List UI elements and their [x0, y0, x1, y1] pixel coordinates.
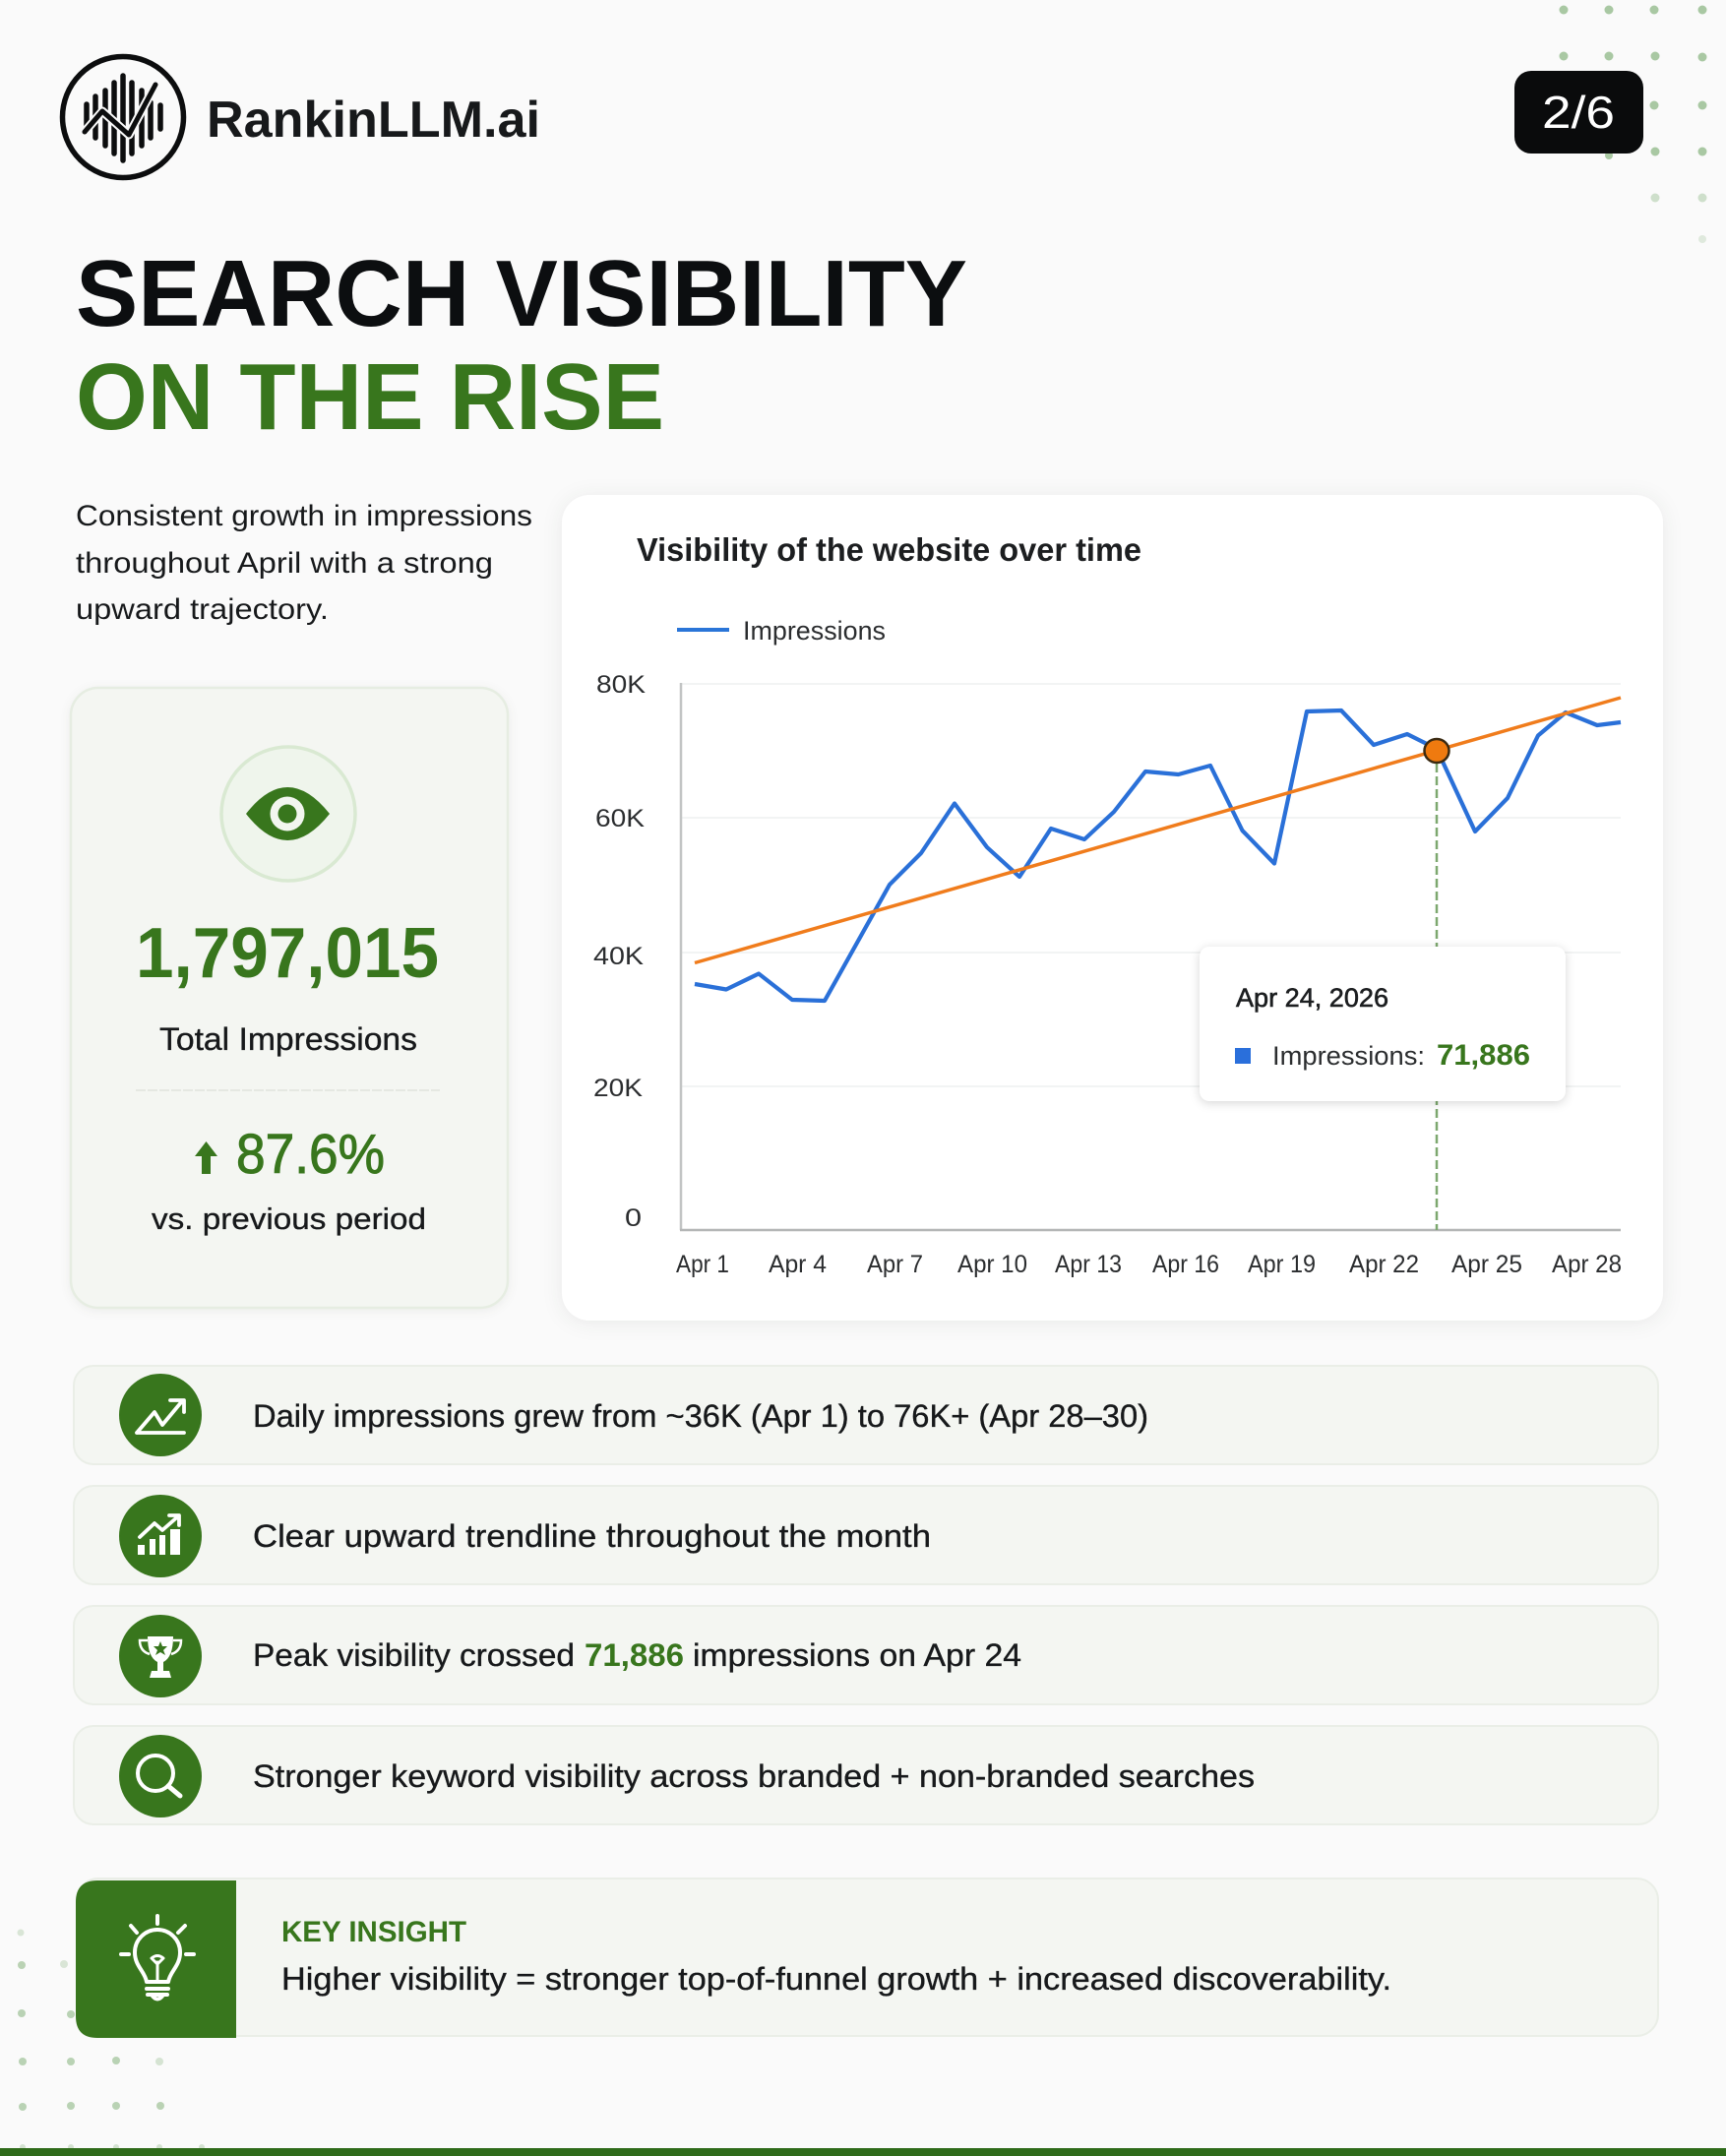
x axis labels: Apr 25 — [1451, 1251, 1522, 1278]
panel: line chart — [562, 495, 1663, 1321]
title: SEARCH VISIBILITY — [76, 241, 967, 346]
title — [76, 241, 967, 450]
icon: eye — [221, 747, 355, 881]
y axis labels — [593, 671, 646, 1232]
x axis labels: Apr 7 — [867, 1251, 923, 1278]
legend: Impressions — [743, 616, 886, 646]
marker guide line — [1436, 751, 1438, 1230]
change percentage: 87.6% — [236, 1123, 385, 1186]
x axis labels: Apr 19 — [1248, 1251, 1316, 1278]
decorative dots: top right — [1559, 6, 1706, 243]
panel: key insight — [76, 1879, 1658, 2038]
bullet row: daily impressions — [74, 1366, 1658, 1464]
y axis labels: 60K — [595, 805, 645, 832]
logo wordmark: RankinLLM.ai — [207, 92, 540, 149]
bullet row: daily impressions: Daily impressions grew from ~36K (Apr 1) to 76K+ (Apr 28–30) — [253, 1398, 1148, 1434]
y axis labels: 20K — [593, 1075, 643, 1102]
x axis labels: Apr 1 — [676, 1251, 729, 1278]
decorative dots: bottom left — [18, 1929, 205, 2150]
bullet row: peak visibility: 71,886 — [585, 1637, 684, 1673]
title: ON THE RISE — [76, 344, 664, 450]
tooltip: Impressions: — [1272, 1041, 1425, 1071]
icon: light bulb — [76, 1880, 236, 2038]
intro text: upward trajectory. — [76, 593, 329, 626]
chart title: Visibility of the website over time — [637, 531, 1141, 568]
icon: up arrow — [195, 1141, 217, 1174]
x axis labels — [676, 1251, 1622, 1278]
bullet row: upward trendline: Clear upward trendline throughout the month — [253, 1518, 931, 1554]
intro text — [76, 500, 532, 626]
y axis labels: 0 — [625, 1204, 642, 1232]
icon: rising chart — [119, 1374, 202, 1456]
bullet row: keyword visibility: Stronger keyword visibility across branded + non-branded searches — [253, 1758, 1255, 1794]
bullet row: peak visibility: impressions on Apr 24 — [693, 1637, 1021, 1673]
x axis labels: Apr 10 — [957, 1251, 1027, 1278]
x axis labels: Apr 22 — [1349, 1251, 1419, 1278]
icon: magnifier — [119, 1735, 202, 1817]
x axis labels: Apr 28 — [1552, 1251, 1622, 1278]
panel: total impressions KPI — [71, 688, 508, 1308]
page badge — [1514, 71, 1643, 154]
bullet row: peak visibility: Peak visibility crossed — [253, 1637, 575, 1673]
x axis labels: Apr 16 — [1152, 1251, 1219, 1278]
tooltip: 71,886 — [1437, 1039, 1530, 1072]
comparison label: vs. previous period — [152, 1201, 426, 1236]
gridlines and axes — [680, 683, 1621, 1230]
icon: trophy — [119, 1615, 202, 1697]
footer bar — [0, 2148, 1726, 2156]
total impressions label: Total Impressions — [159, 1021, 417, 1057]
intro text: throughout April with a strong — [76, 547, 493, 580]
bullet row: peak visibility — [74, 1606, 1658, 1704]
x axis labels: Apr 4 — [769, 1251, 827, 1278]
page badge: 2/6 — [1542, 87, 1615, 138]
logo — [63, 57, 540, 177]
y axis labels: 80K — [596, 671, 646, 699]
key insight text: Higher visibility = stronger top-of-funnel growth + increased discoverability. — [281, 1961, 1391, 1997]
bullet row: keyword visibility — [74, 1726, 1658, 1824]
intro text: Consistent growth in impressions — [76, 500, 532, 532]
y axis labels: 40K — [593, 943, 644, 970]
x axis labels: Apr 13 — [1055, 1251, 1122, 1278]
tooltip: Apr 24, 2026 — [1236, 983, 1388, 1013]
tooltip — [1200, 947, 1566, 1101]
icon: bar chart with arrow — [119, 1495, 202, 1577]
trend line — [695, 698, 1621, 962]
key insight label: KEY INSIGHT — [281, 1916, 466, 1948]
peak marker — [1425, 739, 1449, 763]
bullet row: upward trendline — [74, 1486, 1658, 1584]
total impressions value: 1,797,015 — [136, 914, 439, 993]
icon: logo mark — [63, 57, 183, 177]
impressions line — [695, 710, 1621, 1001]
